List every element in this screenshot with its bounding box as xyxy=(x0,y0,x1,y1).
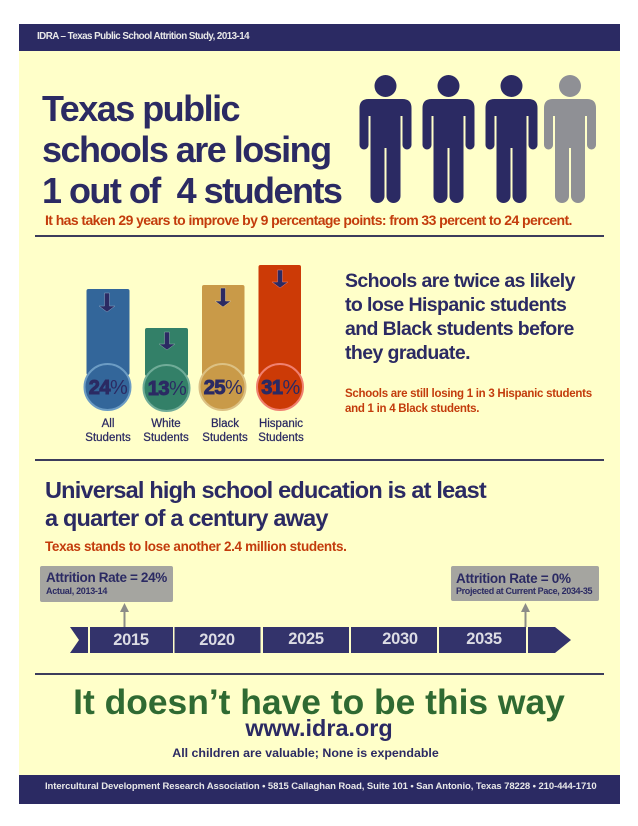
heading: universal education xyxy=(45,477,486,531)
text block: twice as likely: to lose Hispanic students xyxy=(345,294,566,316)
timeline: 2030 xyxy=(382,630,418,648)
title: schools are losing xyxy=(42,129,331,170)
bar: black students: Students xyxy=(202,432,248,444)
callout: 24 percent: Actual, 2013-14 xyxy=(46,586,107,596)
bar: black students: Black xyxy=(211,418,239,430)
timeline: 2015 xyxy=(113,631,149,649)
arrow: 2015 xyxy=(120,603,129,627)
callout: 24 percent xyxy=(40,566,173,602)
bar: white students xyxy=(143,328,190,444)
callout: 0 percent xyxy=(451,566,599,601)
footer bar xyxy=(19,775,620,804)
text block: twice as likely xyxy=(345,270,576,364)
bar: white students: Students xyxy=(143,432,189,444)
timeline: 2020 xyxy=(199,631,235,649)
tagline: All children are valuable; None is expendable xyxy=(172,746,439,760)
subtitle: It has taken 29 years to improve by 9 percentage points: from 33 percent to 24 percent. xyxy=(45,212,572,228)
person 4 xyxy=(544,75,596,203)
bar: all students: Students xyxy=(85,432,131,444)
title: 1 out of 4 students xyxy=(42,170,341,211)
person 1 xyxy=(360,75,412,203)
callout: 0 percent: Projected at Current Pace, 2034-35 xyxy=(456,586,592,596)
header bar xyxy=(19,24,620,51)
bar: white students: White xyxy=(151,418,181,430)
arrow: 2035 xyxy=(521,603,530,627)
text block: twice as likely: and Black students before xyxy=(345,318,574,340)
header text: IDRA – Texas Public School Attrition Study, 2013-14 xyxy=(37,31,249,42)
bar: hispanic students: Students xyxy=(258,432,304,444)
timeline: 2025 xyxy=(288,630,324,648)
footer text: Intercultural Development Research Association • 5815 Callaghan Road, Suite 101 • San Antonio, Texas 78228 • 210-444-1710 xyxy=(45,781,597,792)
bar chart xyxy=(84,265,304,444)
callout: 24 percent: Attrition Rate = 24% xyxy=(46,570,167,585)
text block: still losing: and 1 in 4 Black students. xyxy=(345,402,479,414)
divider xyxy=(35,459,604,461)
text block: twice as likely: they graduate. xyxy=(345,342,470,364)
bar: hispanic students xyxy=(257,265,304,444)
bar: black students xyxy=(200,285,248,444)
person 2 xyxy=(422,75,474,203)
closing headline: It doesn’t have to be this way xyxy=(73,682,565,722)
subheading: Texas stands to lose another 2.4 million students. xyxy=(45,539,347,554)
heading: universal education: a quarter of a century away xyxy=(45,505,328,531)
bar: hispanic students: Hispanic xyxy=(259,418,303,430)
title xyxy=(42,88,342,211)
bar: all students: 24% xyxy=(89,377,128,399)
person 3 xyxy=(486,75,538,203)
heading: universal education: Universal high school education is at least xyxy=(45,477,486,503)
icon: four people xyxy=(360,75,596,203)
timeline: 2035 xyxy=(466,630,502,648)
divider xyxy=(35,235,604,237)
bar: black students: 25% xyxy=(204,377,243,399)
bar: white students: 13% xyxy=(148,378,187,400)
bar: hispanic students: 31% xyxy=(261,377,300,399)
text block: twice as likely: Schools are twice as likely xyxy=(345,270,575,292)
bar: all students xyxy=(84,289,131,444)
title: Texas public xyxy=(42,88,239,129)
divider xyxy=(35,673,604,675)
timeline xyxy=(70,627,571,653)
text block: still losing xyxy=(345,388,592,414)
callout: 0 percent: Attrition Rate = 0% xyxy=(456,571,571,586)
website: www.idra.org xyxy=(245,715,393,741)
text block: still losing: Schools are still losing 1 in 3 Hispanic students xyxy=(345,388,592,400)
bar: all students: All xyxy=(102,418,114,430)
